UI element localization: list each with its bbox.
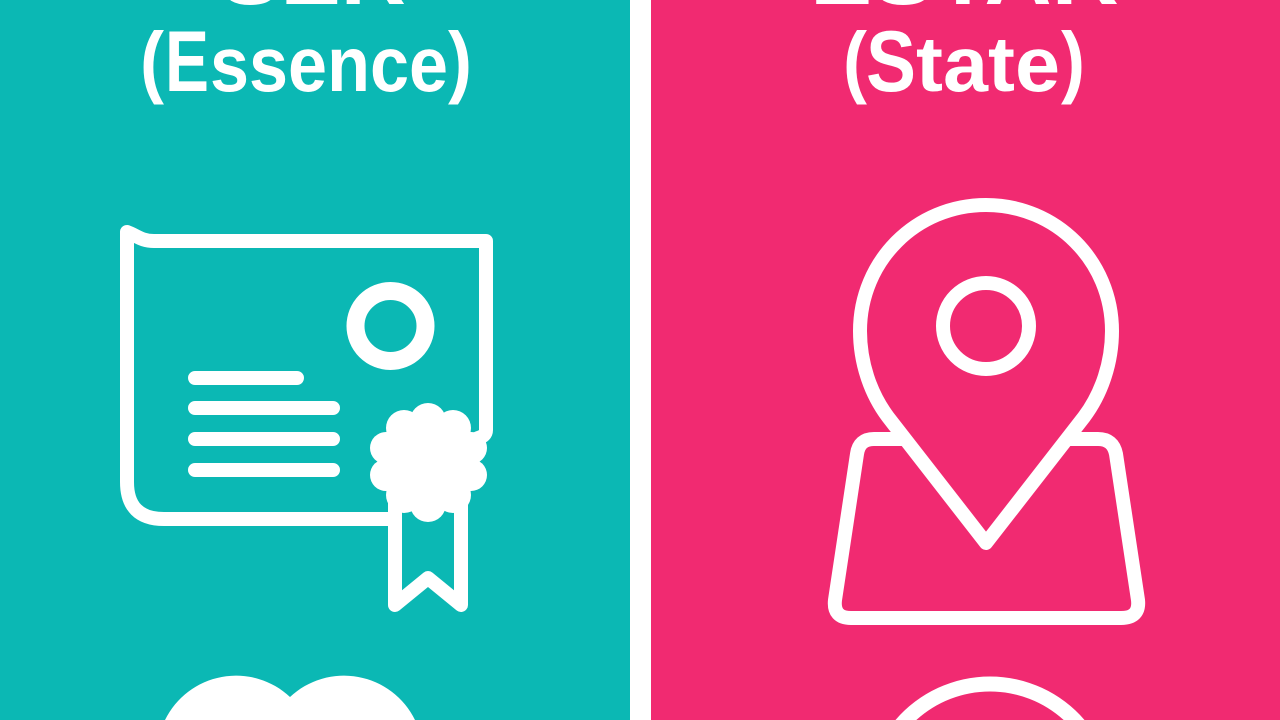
ribbon xyxy=(395,488,461,605)
heading: (Essence): ( xyxy=(140,16,164,105)
heading: (Essence): E xyxy=(165,14,209,110)
map base xyxy=(835,439,1138,618)
divider xyxy=(630,0,651,720)
icon: map pin on map xyxy=(835,205,1138,618)
rosette seal xyxy=(370,403,487,522)
heading: (Essence): ) xyxy=(448,16,472,105)
heading: (State): tate xyxy=(916,20,1060,108)
photo circle xyxy=(356,291,426,361)
icon: heart (cropped) xyxy=(165,676,415,720)
text lines xyxy=(195,378,333,470)
heading: (State): ) xyxy=(1061,16,1085,105)
pin outline xyxy=(860,205,1112,543)
panel: SER (Essence) xyxy=(0,0,630,720)
pin inner circle xyxy=(943,283,1029,369)
heading: (State): ( xyxy=(843,16,867,105)
certificate outline xyxy=(127,232,486,519)
heading: (Essence): ssence xyxy=(210,20,448,108)
heading: (State) xyxy=(843,14,1085,110)
icon: circle (cropped) xyxy=(896,677,1084,720)
panel: ESTAR (State) xyxy=(651,0,1280,720)
icon: certificate with seal xyxy=(127,232,487,605)
heading: (State): S xyxy=(866,14,916,110)
